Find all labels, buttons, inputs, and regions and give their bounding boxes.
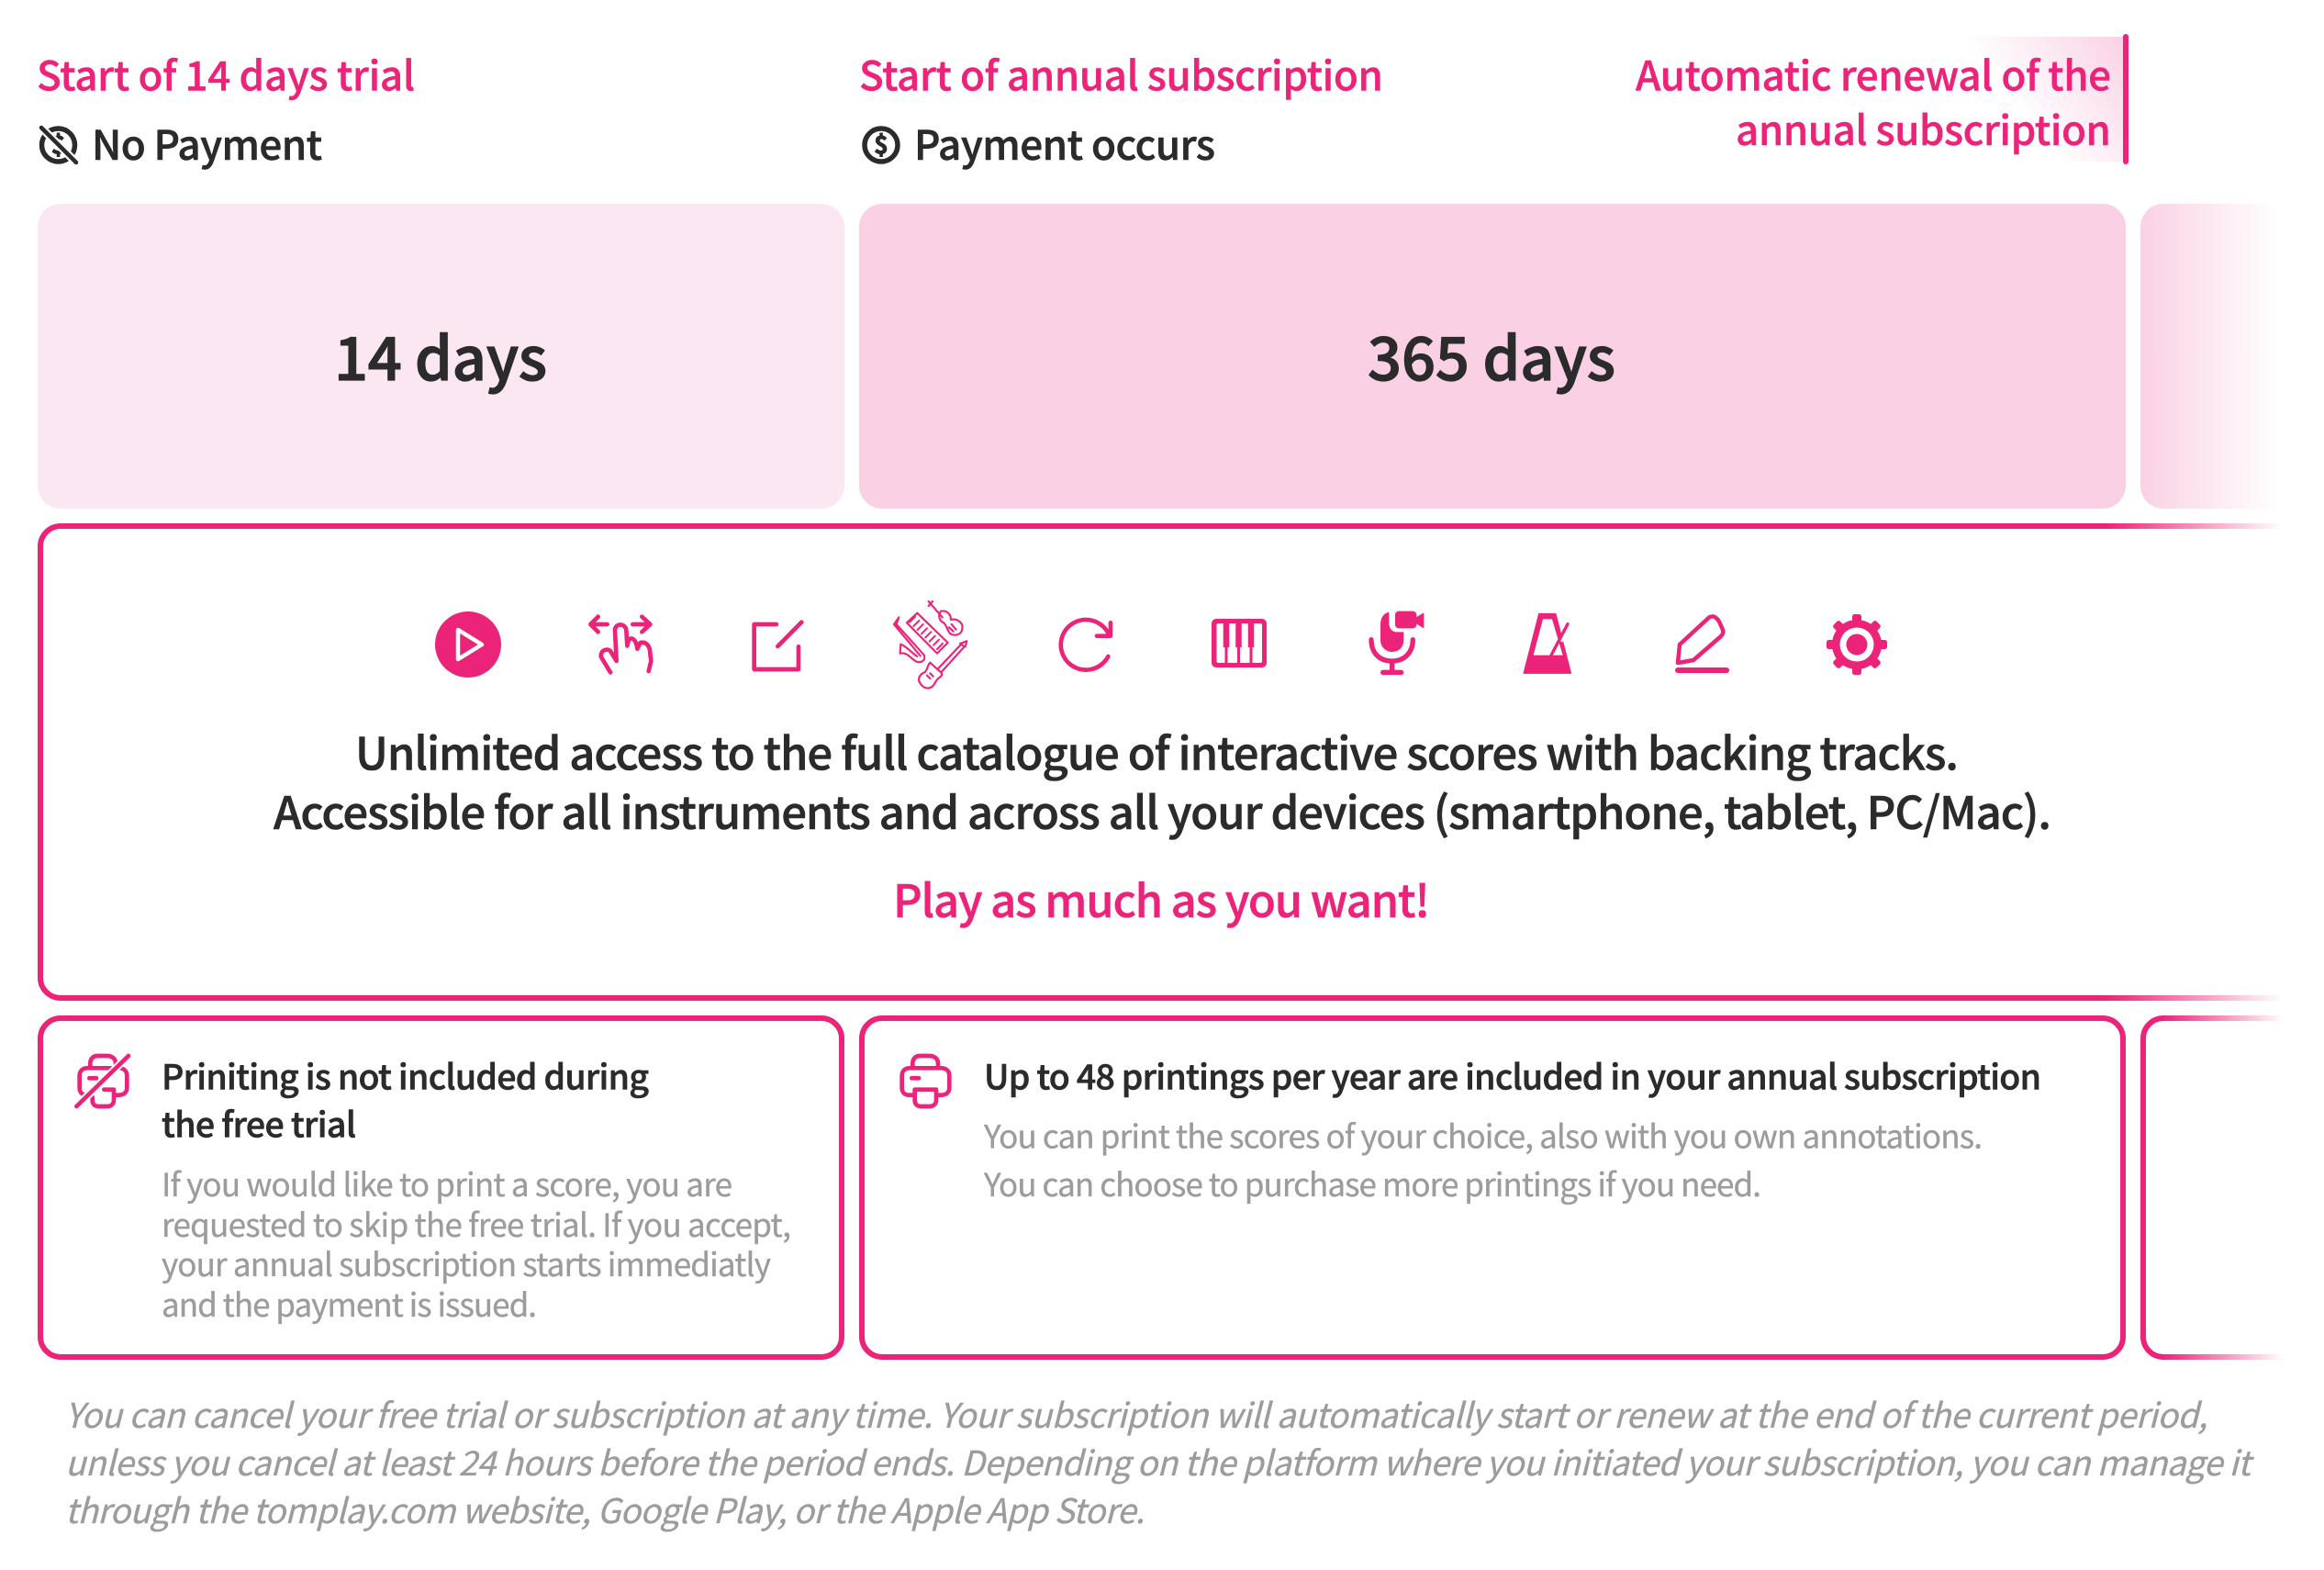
icon: payment: $: [874, 127, 888, 161]
heading: trial start: Start of 14 days trial: [37, 44, 415, 103]
panel: printing during free trial: [40, 1018, 842, 1357]
text: play as much: Play as much as you want!: [893, 866, 1430, 931]
footnote: You can cancel your free trial or subscription at any time. Your subscription will automatically start or renew at the end of the current period,: [65, 1388, 2207, 1438]
text: skip trial explanation: requested to skip the free trial. If you accept,: [162, 1200, 791, 1247]
panel: next period fading: [2143, 1018, 2324, 1357]
text: unlimited access: Unlimited access to the full catalogue of interactive scores with backing tracks.: [355, 718, 1959, 784]
heading: subscription start: Start of annual subscription: [859, 44, 1383, 103]
icon: printer: [902, 1056, 949, 1106]
text: skip trial explanation: your annual subscription starts immediatly: [162, 1239, 771, 1286]
timeline block: 14 days: 14 days: [334, 311, 547, 398]
text: printing explanation: You can print the scores of your choice, also with you own annotations.: [983, 1111, 1983, 1159]
text: skip trial explanation: and the payment is issued.: [162, 1280, 537, 1327]
timeline block: 365 days: 365 days: [1368, 311, 1615, 398]
header: automatic renewal marker: [1636, 34, 2128, 164]
icon: metronome: [1524, 613, 1571, 673]
icon: settings gear: [1827, 614, 1887, 675]
panel border: [862, 1018, 2123, 1357]
icon: no payment: $: [51, 127, 65, 161]
panel border: [40, 1018, 842, 1357]
icon: play: [435, 611, 501, 678]
panel border: [40, 526, 2324, 998]
icon: pencil: [1678, 616, 1726, 670]
text: printing explanation: You can choose to purchase more printings if you need.: [983, 1160, 1761, 1206]
heading: printing not included: Priniting is not included during: [162, 1049, 649, 1100]
text: devices: Accessible for all instruments and across all your devices (smartphone, tablet, PC/Mac).: [274, 778, 2051, 843]
footnote: through the tomplay.com website, Google Play, or the Apple App Store.: [65, 1484, 1145, 1533]
header: start of 14 days trial: [37, 44, 415, 172]
marker gradient: [1962, 37, 2125, 162]
icon: microphone with camera: [1371, 611, 1424, 672]
panel: unlimited access: [40, 526, 2324, 998]
heading: 48 printings: Up to 48 printings per year are included in your annual subscription: [984, 1049, 2041, 1100]
text: printing explanation: [983, 1111, 1983, 1206]
icon: piano: [1212, 619, 1267, 667]
icon: external link: [754, 622, 801, 669]
label: payment occurs: Payment occurs: [914, 113, 1215, 172]
text: skip trial explanation: If you would like to print a score, you are: [162, 1160, 732, 1206]
icon: restart: [1061, 620, 1111, 670]
timeline block: next period fading: [2140, 204, 2324, 509]
icon: no payment: [41, 127, 76, 163]
footnote: [65, 1388, 2254, 1533]
label: no payment: No Payment: [92, 113, 322, 172]
icon: printer crossed out: [76, 1056, 128, 1106]
header: start of annual subscription: [859, 44, 1383, 172]
icon: payment: [865, 127, 898, 162]
text: skip trial explanation: [162, 1160, 791, 1327]
panel: printing during subscription: [862, 1018, 2123, 1357]
heading: automatic renewal: Automatic renewal of the: [1636, 44, 2111, 103]
marker bar: [2123, 34, 2128, 164]
timeline block: 365 days: [859, 204, 2126, 509]
header: automatic renewal marker: annual subscription: [1736, 98, 2111, 157]
icon: swipe hand: [590, 617, 651, 672]
timeline block: 14 days: [38, 204, 844, 509]
footnote: unless you cancel at least 24 hours before the period ends. Depending on the platform where you initiated your subscription, you can manage it: [65, 1436, 2254, 1486]
panel: printing during free trial: the free trial: [162, 1096, 356, 1148]
icon: instruments: [894, 601, 966, 689]
